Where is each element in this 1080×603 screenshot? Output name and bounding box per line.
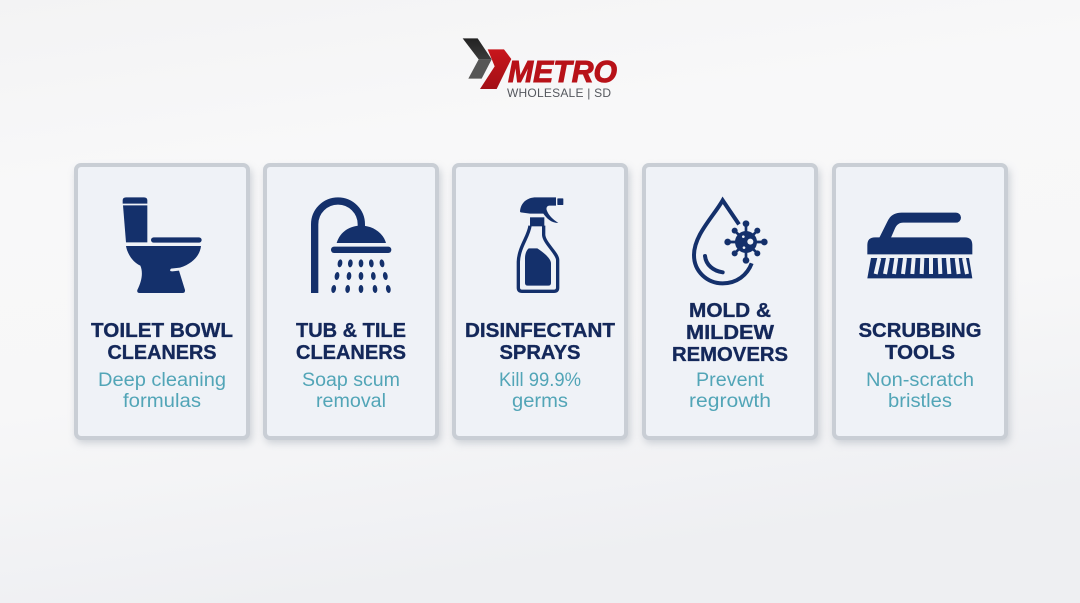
description: removal: [316, 391, 386, 412]
description: Non-scratch: [866, 370, 974, 391]
panel: mold and mildew removers: [644, 165, 820, 443]
logo wordmark: METRO: [508, 54, 617, 89]
description: Deep cleaning: [98, 370, 226, 391]
description: Prevent: [696, 370, 765, 391]
panel: scrubbing tools: [834, 165, 1010, 443]
heading: [465, 320, 615, 364]
description: germs: [512, 391, 568, 412]
logo: Metro Wholesale SD: [463, 38, 617, 100]
panel: tub and tile cleaners: [265, 165, 441, 443]
heading: TUB & TILE: [296, 320, 406, 342]
heading: [296, 320, 406, 364]
icon: water drop with germ: [694, 200, 768, 283]
description: [302, 370, 400, 412]
icon: spray bottle: [518, 197, 563, 291]
panel: disinfectant sprays: [454, 165, 630, 443]
heading: CLEANERS: [296, 342, 406, 364]
description: [499, 370, 581, 412]
heading: TOILET BOWL: [91, 320, 233, 342]
description: [866, 370, 974, 412]
icon: toilet: [123, 197, 202, 293]
description: bristles: [888, 391, 952, 412]
panel: toilet bowl cleaners: [76, 165, 252, 443]
description: Soap scum: [302, 370, 400, 391]
description: Kill 99.9%: [499, 370, 581, 391]
heading: MOLD &: [689, 300, 771, 322]
heading: [91, 320, 233, 364]
description: formulas: [123, 391, 201, 412]
description: regrowth: [689, 391, 771, 412]
description: [689, 370, 771, 412]
heading: REMOVERS: [672, 344, 788, 366]
icon: logo chevrons: [463, 38, 511, 89]
heading: CLEANERS: [108, 342, 216, 364]
description: [98, 370, 226, 412]
icon: scrub brush: [867, 213, 972, 278]
heading: DISINFECTANT: [465, 320, 615, 342]
heading: MILDEW: [686, 322, 774, 344]
heading: SCRUBBING: [858, 320, 982, 342]
heading: [672, 300, 788, 366]
heading: [858, 320, 982, 364]
logo tagline: WHOLESALE | SD: [507, 86, 611, 100]
icon: shower: [315, 201, 391, 293]
heading: TOOLS: [885, 342, 955, 364]
heading: SPRAYS: [500, 342, 580, 364]
